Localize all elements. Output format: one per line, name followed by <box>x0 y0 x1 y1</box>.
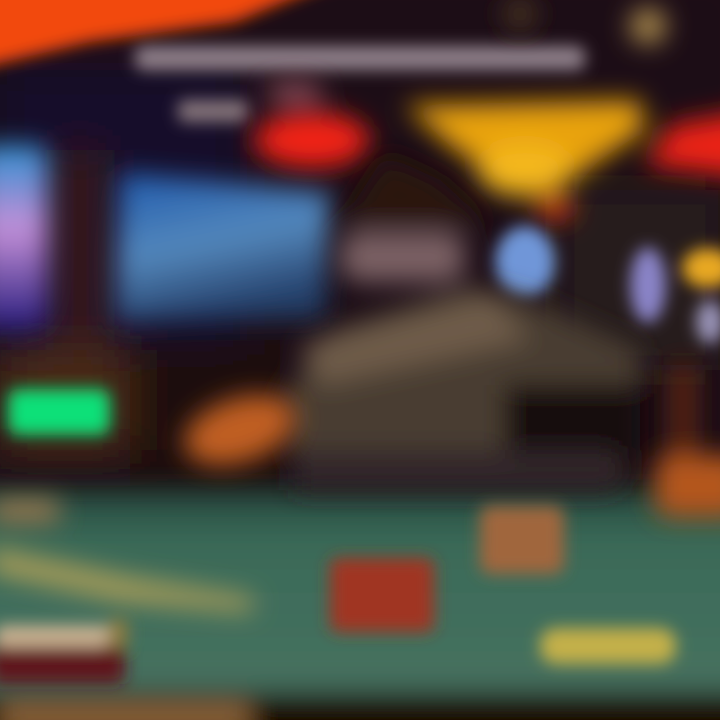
right slot screens <box>495 226 720 344</box>
red chip stack <box>330 558 434 632</box>
white and red chips at bottom left <box>0 618 128 684</box>
hand resting on the table <box>175 382 305 478</box>
tan chip stack <box>480 506 564 574</box>
background: dark casino room <box>0 0 720 500</box>
title: illegible blurred heading <box>135 46 585 122</box>
background: green table <box>0 490 720 720</box>
table markings <box>0 500 255 612</box>
left slot screen <box>0 145 48 330</box>
yellow chip stack <box>540 628 676 664</box>
orange figure at right edge <box>655 365 720 517</box>
orange ceiling wedge <box>0 0 360 70</box>
centre slot screen <box>115 172 330 322</box>
ceiling lights: red and yellow <box>254 0 720 220</box>
green slot display <box>8 389 110 435</box>
person at the table <box>280 155 640 490</box>
